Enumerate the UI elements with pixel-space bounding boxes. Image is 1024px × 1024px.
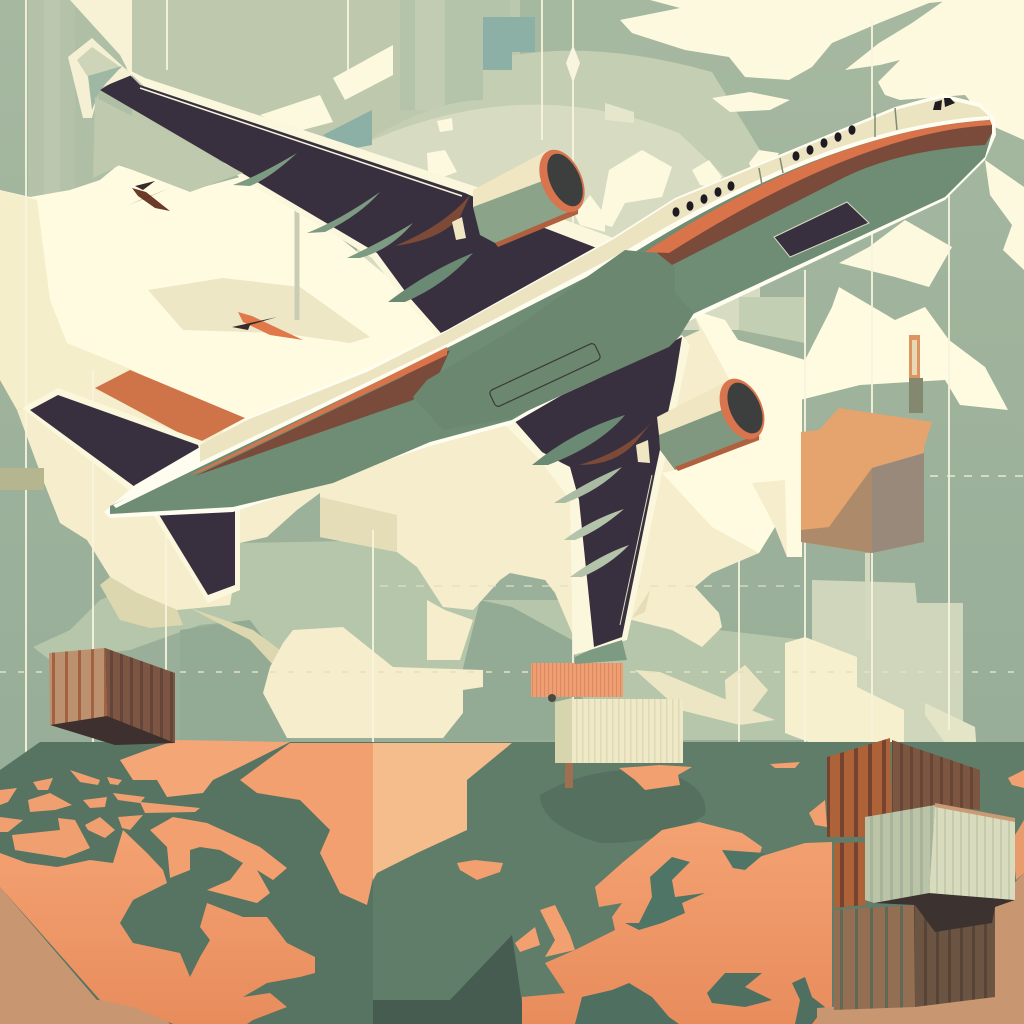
door outlines	[759, 108, 897, 185]
fuselage	[104, 94, 996, 518]
passenger windows	[672, 125, 856, 217]
map: Indonesia shapes	[635, 665, 775, 725]
map: right pale tower	[812, 580, 963, 757]
engine: upper	[395, 143, 594, 247]
wing underside panel	[93, 97, 243, 192]
wing root fairing	[413, 250, 694, 430]
cockpit windows	[933, 98, 955, 110]
continent: Canada main land	[0, 830, 315, 1024]
sea: lighter panel	[373, 742, 1024, 1024]
continent: Greenland east side	[373, 743, 512, 880]
map: pale lower band	[33, 540, 805, 740]
cargo door	[774, 202, 869, 257]
map: soft beige shape	[148, 278, 370, 343]
continent: Baffin Island	[150, 817, 287, 903]
map: beige panels	[100, 497, 650, 667]
map: right cream tower	[785, 637, 904, 760]
right edge orange strip	[1012, 820, 1024, 880]
container stack: middle	[834, 842, 866, 908]
background vertical panels	[28, 0, 642, 200]
container stack: cream	[865, 803, 1015, 903]
sea: Mediterranean, Black and Caspian	[575, 973, 825, 1024]
lower wing	[500, 335, 690, 655]
continent: Europe and Russia	[522, 822, 832, 1024]
sea: Baltic and White Sea	[625, 850, 765, 930]
fairing access panel	[489, 342, 601, 408]
sea shadow ellipse	[540, 769, 705, 843]
continent: British Isles	[515, 905, 575, 957]
continent: Ellesmere	[120, 740, 290, 797]
wing-tip pad	[575, 640, 627, 664]
map: pale green patch	[739, 297, 805, 343]
engine: lower	[579, 372, 773, 471]
concentric arc panels	[357, 51, 760, 330]
container: floating centre cream	[555, 698, 683, 788]
sea: dark corner	[373, 935, 525, 1024]
wing flap fairings	[233, 153, 629, 577]
continent: Iceland	[457, 860, 503, 880]
continent: Svalbard and Nordic islands	[619, 762, 1024, 827]
winglet	[68, 38, 132, 118]
map: central cream land	[17, 310, 872, 647]
container stack: top	[827, 738, 980, 837]
cream winglet sweep	[70, 0, 132, 78]
airplane	[22, 38, 996, 664]
map: upper-left cream land	[0, 165, 465, 470]
map: left pale strip	[0, 190, 133, 410]
map: Australia	[925, 703, 977, 753]
tailplane upper	[22, 388, 210, 495]
bottom sea	[0, 742, 1024, 1024]
map: right bright land	[800, 287, 1008, 410]
left beige band	[0, 468, 44, 490]
teal background blocks	[323, 17, 535, 150]
map: north landmass	[260, 0, 1024, 287]
map: darker sea	[180, 600, 590, 742]
small distant aircraft 2	[232, 312, 303, 340]
bottom right tan land	[817, 873, 1024, 1024]
tailplane lower	[150, 503, 240, 603]
container: floating centre orange	[531, 663, 623, 702]
orange hanging banner	[801, 335, 932, 640]
upper wing	[100, 68, 640, 358]
map: South America	[263, 627, 483, 738]
continent: Greenland	[240, 743, 373, 905]
bottom tan corner	[0, 887, 170, 1024]
tail fin orange	[95, 370, 245, 443]
diamond marker	[566, 45, 580, 83]
small distant aircraft 1	[128, 181, 170, 211]
continent: Arctic islands	[0, 770, 200, 858]
container: floating left	[49, 648, 175, 745]
map: bright cream around lower wing and engine	[662, 310, 872, 557]
container stack: bottom	[834, 893, 1015, 1010]
